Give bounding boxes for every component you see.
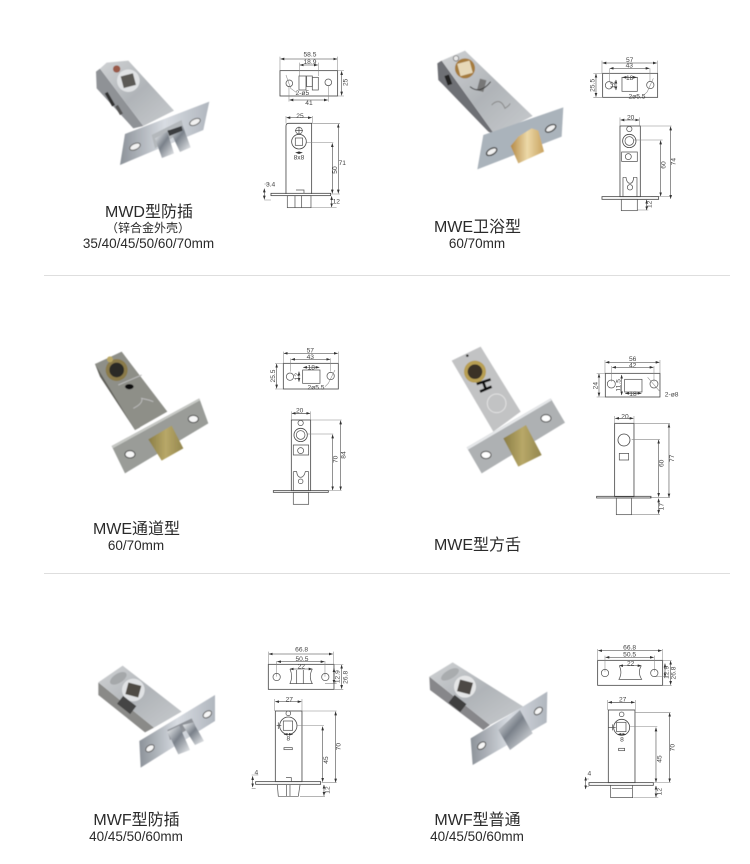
panel: MWE passage <box>93 347 348 553</box>
drawing: MWE bathroom dimensions: 18 <box>626 75 634 82</box>
drawing: MWD dimensions <box>264 51 349 208</box>
label: MWD sizes: 35/40/45/50/60/70mm <box>83 236 214 251</box>
drawing: MWE square bolt dimensions: 17 <box>659 503 666 510</box>
drawing: MWF standard dimensions <box>585 645 677 798</box>
photo: MWF standard lock <box>429 662 547 765</box>
drawing: MWE bathroom dimensions: 25.5 <box>590 79 597 92</box>
drawing: MWE passage dimensions: 20 <box>296 407 304 414</box>
drawing: MWF anti-pick dimensions: 70 <box>336 743 343 750</box>
drawing: MWD dimensions: 71 <box>339 160 346 167</box>
drawing: MWE passage dimensions: 84 <box>341 451 348 459</box>
drawing: MWE passage dimensions: 12 <box>294 373 301 380</box>
drawing: MWE square bolt dimensions: 42 <box>629 362 637 369</box>
panel: MWD <box>83 51 349 251</box>
drawing: MWF anti-pick dimensions: 26.8 <box>342 671 349 684</box>
drawing: MWE bathroom dimensions: 2ø5.5 <box>628 93 646 100</box>
drawing: MWD dimensions: 58.5 <box>303 51 317 58</box>
drawing: MWF standard dimensions: 45 <box>656 755 663 763</box>
drawing: MWF standard dimensions: 66.8 <box>623 645 636 652</box>
label: MWD material: （锌合金外壳） <box>106 220 190 235</box>
drawing: MWE bathroom dimensions: 12 <box>647 200 654 208</box>
drawing: MWF standard dimensions: 12.9 <box>663 666 670 679</box>
drawing: MWE square bolt dimensions: 60 <box>659 459 666 467</box>
label: MWF anti-pick title: MWF型防插 <box>93 811 180 829</box>
drawing: MWE bathroom dimensions: 12 <box>610 81 617 89</box>
drawing: MWF standard dimensions: 70 <box>670 744 677 751</box>
drawing: MWE bathroom dimensions: 20 <box>627 114 635 121</box>
drawing: MWD dimensions: 12 <box>333 198 340 205</box>
drawing: MWE passage dimensions: 18 <box>308 365 315 372</box>
divider: middle row <box>44 573 730 574</box>
drawing: MWF standard dimensions: 50.5 <box>623 651 636 658</box>
panel: MWE square bolt <box>434 347 679 554</box>
drawing: MWF standard dimensions: 8 <box>620 736 624 743</box>
drawing: MWF standard dimensions: 26.8 <box>670 666 677 679</box>
drawing: MWF standard dimensions: 27 <box>619 697 627 704</box>
label: MWE bathroom sizes: 60/70mm <box>449 236 505 251</box>
drawing: MWF anti-pick dimensions: 12.9 <box>334 670 341 683</box>
drawing: MWE square bolt dimensions: 20 <box>621 413 629 420</box>
drawing: MWF anti-pick dimensions: 45 <box>323 756 330 764</box>
drawing: MWD dimensions: 50 <box>332 166 339 174</box>
photo: MWE bathroom lock <box>437 51 563 169</box>
drawing: MWF anti-pick dimensions: 4 <box>254 770 258 777</box>
drawing: MWE bathroom dimensions: 60 <box>661 161 668 169</box>
label: MWF anti-pick sizes: 40/45/50/60mm <box>89 829 183 844</box>
drawing: MWD dimensions: 3.4 <box>266 181 276 188</box>
drawing: MWF anti-pick dimensions <box>252 647 349 796</box>
label: MWF standard sizes: 40/45/50/60mm <box>430 829 524 844</box>
drawing: MWE passage dimensions: 70 <box>332 455 339 463</box>
drawing: MWE square bolt dimensions: 2-ø8 <box>665 392 679 399</box>
drawing: MWE square bolt dimensions: 11.5 <box>616 379 623 392</box>
drawing: MWF anti-pick dimensions: 27 <box>286 696 293 703</box>
panel: MWE bathroom <box>434 51 678 251</box>
panel: MWF anti-pick <box>89 647 349 844</box>
photo: MWF anti-pick lock <box>98 666 215 768</box>
drawing: MWE passage dimensions <box>270 347 348 504</box>
label: MWF standard title: MWF型普通 <box>434 811 521 829</box>
photo: MWE square bolt lock <box>452 347 565 473</box>
drawing: MWE passage dimensions: 25.5 <box>270 369 277 382</box>
drawing: MWE square bolt dimensions: 77 <box>669 454 676 462</box>
drawing: MWF anti-pick dimensions: 22 <box>298 664 305 671</box>
drawing: MWF standard dimensions: 22 <box>627 660 635 667</box>
drawing: MWE bathroom dimensions <box>590 57 678 211</box>
label: MWE bathroom title: MWE卫浴型 <box>434 218 521 236</box>
drawing: MWD dimensions: 41 <box>305 100 313 107</box>
drawing: MWE bathroom dimensions: 74 <box>671 158 678 165</box>
label: MWE passage sizes: 60/70mm <box>108 538 164 553</box>
drawing: MWE passage dimensions: 2ø5.5 <box>307 384 325 391</box>
drawing: MWD dimensions: 25 <box>342 78 349 86</box>
photo: MWE passage lock <box>95 352 208 473</box>
drawing: MWE bathroom dimensions: 57 <box>626 57 634 64</box>
drawing: MWE bathroom dimensions: 43 <box>626 63 633 70</box>
drawing: MWD dimensions: 2-ø5 <box>295 90 309 97</box>
drawing: MWF anti-pick dimensions: 8 <box>286 736 290 743</box>
drawing: MWE passage dimensions: 43 <box>307 354 314 361</box>
drawing: MWD dimensions: 25 <box>296 113 304 120</box>
drawing: MWE square bolt dimensions: 24 <box>592 382 599 389</box>
drawing: MWE square bolt dimensions: 18 <box>629 391 637 398</box>
label: MWE passage title: MWE通道型 <box>93 520 180 538</box>
drawing: MWE passage dimensions: 57 <box>307 347 314 354</box>
drawing: MWF standard dimensions: 4 <box>587 771 591 778</box>
drawing: MWF standard dimensions: 12 <box>656 788 663 795</box>
drawing: MWD dimensions: 8x8 <box>294 154 305 161</box>
drawing: MWF anti-pick dimensions: 66.8 <box>295 647 308 654</box>
label: MWE square bolt title: MWE型方舌 <box>434 536 521 554</box>
photo: MWD lock <box>96 61 209 165</box>
drawing: MWE square bolt dimensions: 56 <box>629 356 637 363</box>
drawing: MWE square bolt dimensions <box>592 356 679 515</box>
drawing: MWF anti-pick dimensions: 50.5 <box>295 656 309 663</box>
label: MWD title: MWD型防插 <box>105 203 193 221</box>
panel: MWF standard <box>429 645 677 844</box>
drawing: MWF anti-pick dimensions: 12 <box>324 786 331 794</box>
drawing: MWD dimensions: 18.9 <box>303 59 317 66</box>
divider: top row <box>44 275 730 276</box>
